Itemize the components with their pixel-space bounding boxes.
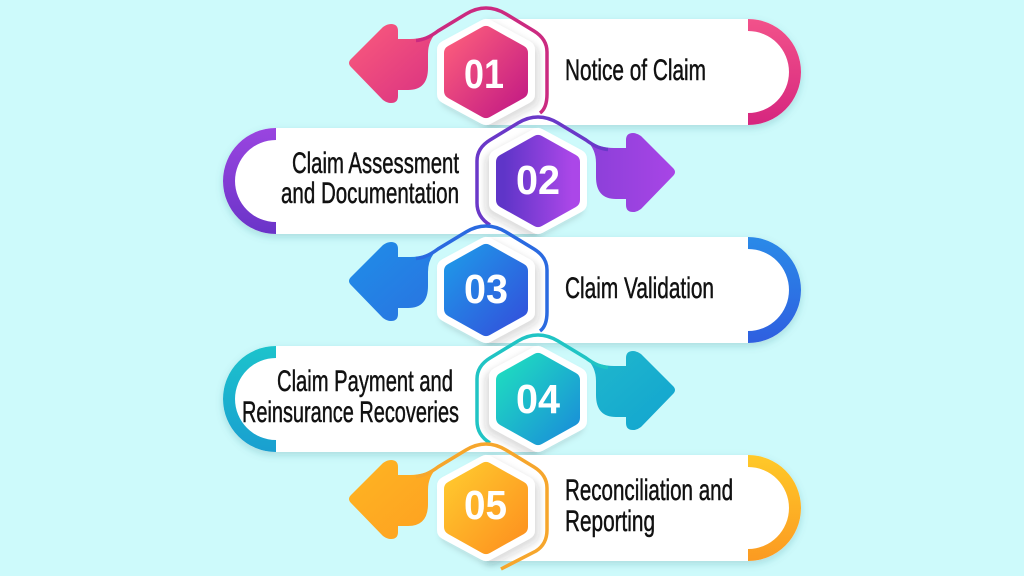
step 4 white bar <box>223 346 538 452</box>
step 5 outline <box>416 444 547 569</box>
step 2 end cap <box>223 128 276 234</box>
step 4 outline <box>477 335 608 443</box>
step 3 end cap <box>748 237 801 343</box>
step 1 colored hexagon <box>452 34 520 110</box>
step 4 colored hexagon <box>504 361 572 437</box>
step 3 graphic <box>349 226 801 343</box>
step 5: Reconciliation and Reporting <box>349 444 801 569</box>
step 5 label: Reconciliation and <box>565 474 733 507</box>
step 4 label: Claim Payment and <box>277 365 453 398</box>
step 5 colored hexagon <box>452 470 520 546</box>
step 3 white bar <box>486 237 801 343</box>
step 3 outline <box>416 226 547 331</box>
step 2 label line 2: and Documentation <box>281 177 459 210</box>
step 2: Claim Assessment and Documentation <box>223 117 675 234</box>
step 4 arrow <box>586 351 675 430</box>
step 3 label: Claim Validation <box>565 272 714 305</box>
step 5 arrow <box>349 460 438 539</box>
step 1 white bar <box>486 19 801 125</box>
step 2 arrow <box>586 133 675 212</box>
step 2 label: Claim Assessment <box>292 147 459 180</box>
number 03: 03 <box>464 266 508 312</box>
step 1: Notice of Claim <box>349 8 801 125</box>
step 4 end cap <box>223 346 276 452</box>
step 2 white bar <box>223 128 538 234</box>
step 4 label line 2: Reinsurance Recoveries <box>242 396 459 429</box>
number 02: 02 <box>516 157 560 203</box>
step 3 arrow <box>349 242 438 321</box>
step 1 outline <box>416 8 547 113</box>
step 2 outline <box>477 117 608 225</box>
step 5 white hexagon <box>447 465 525 551</box>
step 1 arrow <box>349 24 438 103</box>
step 1 end cap <box>748 19 801 125</box>
step 3 white hexagon <box>447 247 525 333</box>
step 4 graphic <box>223 335 675 452</box>
step 4: Claim Payment and Reinsurance Recoveries <box>223 335 675 452</box>
step 2 graphic <box>223 117 675 234</box>
step 2 colored hexagon <box>504 143 572 219</box>
step 1 graphic <box>349 8 801 125</box>
step 5 label line 2: Reporting <box>565 505 655 538</box>
step 5 white bar <box>486 455 801 561</box>
step 3 colored hexagon <box>452 252 520 328</box>
step 4 white hexagon <box>499 356 577 442</box>
number 05: 05 <box>464 482 507 528</box>
step 1 label: Notice of Claim <box>565 54 706 87</box>
step 5 graphic <box>349 444 801 569</box>
step 1 white hexagon <box>447 29 525 115</box>
step 2 white hexagon <box>499 138 577 224</box>
step 3: Claim Validation <box>349 226 801 343</box>
step 5 end cap <box>748 455 801 561</box>
number 04: 04 <box>516 376 560 422</box>
number 01: 01 <box>464 51 504 97</box>
